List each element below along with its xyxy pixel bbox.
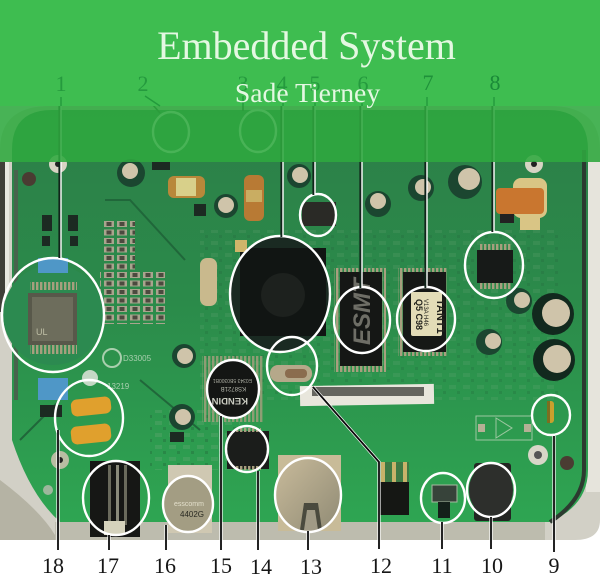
item 15 KENDIN chip xyxy=(202,356,264,422)
small dark parts xyxy=(40,162,206,442)
enclosure frame xyxy=(0,106,600,540)
number 17: 17 xyxy=(97,553,119,578)
leader lines: bottom xyxy=(58,387,554,552)
item 9 fuse and diode mark xyxy=(476,401,554,440)
ring 16 xyxy=(163,476,213,532)
number 3: 3 xyxy=(238,71,248,96)
number 12: 12 xyxy=(370,553,392,578)
ring 2 xyxy=(153,112,189,152)
ring 5 xyxy=(300,194,336,236)
item 11 switch xyxy=(432,485,457,518)
ring 6 xyxy=(334,287,390,353)
item 18 orange capacitors xyxy=(70,396,112,445)
item 7 TANT1 chip xyxy=(398,268,448,356)
numbers along bottom xyxy=(42,553,560,579)
subtitle: Sade Tierney xyxy=(235,77,380,108)
item 6 ESMT chip: ESMT xyxy=(349,276,376,345)
green board xyxy=(12,110,588,522)
ring 14 xyxy=(226,426,268,472)
surface traces and pads xyxy=(200,230,560,400)
number 4: 4 xyxy=(276,71,288,96)
callout rings xyxy=(2,110,570,535)
ring 3 xyxy=(240,110,276,152)
number 6: 6 xyxy=(358,71,368,96)
numbers over banner xyxy=(56,70,500,96)
barcode label xyxy=(300,384,434,406)
item 12 header pins xyxy=(380,462,409,515)
number 15: 15 xyxy=(210,553,232,578)
number 1: 1 xyxy=(56,71,66,96)
photo: circuit board: 13219 xyxy=(107,382,130,391)
number 11: 11 xyxy=(431,553,453,578)
ring 15 xyxy=(207,360,259,418)
mounting holes xyxy=(49,155,67,173)
green band overlay xyxy=(0,106,600,162)
ring 13 xyxy=(275,458,341,532)
ring 18 xyxy=(55,380,123,456)
ring 7 xyxy=(397,287,455,351)
ring 12 xyxy=(267,337,317,395)
item 17 phone jack xyxy=(90,461,140,537)
capacitors xyxy=(117,159,575,430)
ring 8 xyxy=(465,232,523,298)
3-pin header, item 5 xyxy=(302,202,336,226)
photo: circuit board xyxy=(0,106,600,540)
item 15 KENDIN chip: KENDIN xyxy=(211,395,248,406)
item 14 chip xyxy=(227,428,269,470)
ring 1 xyxy=(2,258,104,372)
title banner xyxy=(0,0,600,106)
number 18: 18 xyxy=(42,553,64,578)
ring 11 xyxy=(421,473,465,523)
ring 10 xyxy=(467,463,515,517)
item 7 TANT1 chip: Q5 C98 xyxy=(414,299,424,330)
item 6 ESMT chip xyxy=(334,268,386,372)
item 15 KENDIN chip: KS8721B xyxy=(221,385,246,391)
number 7: 7 xyxy=(422,70,434,95)
number 8: 8 xyxy=(490,70,500,95)
coils xyxy=(168,175,547,230)
item 10 power jack xyxy=(469,463,513,521)
number 9: 9 xyxy=(548,553,560,578)
item 16 transformer can: esscomm xyxy=(174,501,204,508)
item 7 TANT1 chip: V13A H46 xyxy=(422,299,428,327)
number 16: 16 xyxy=(154,553,176,578)
ring 17 xyxy=(83,461,149,535)
item 15 KENDIN chip: E0343 5B0300B1 xyxy=(213,377,252,383)
item 7 TANT1 chip: TANT1 xyxy=(434,299,446,334)
resistor arrays xyxy=(103,220,135,270)
number 14: 14 xyxy=(250,554,272,579)
crystal xyxy=(200,258,217,306)
item 16 transformer can: 4402G xyxy=(180,510,204,519)
item 12 crystal xyxy=(270,365,312,382)
ring 9 xyxy=(532,395,570,435)
leader lines over banner xyxy=(61,96,494,106)
ring 4 xyxy=(230,236,330,352)
item 13 RJ45 socket xyxy=(275,455,341,532)
number 10: 10 xyxy=(481,553,503,578)
number 5: 5 xyxy=(310,71,320,96)
leader lines: top xyxy=(60,96,494,288)
number 2: 2 xyxy=(138,71,148,96)
title: Embedded System xyxy=(157,23,456,68)
item 16 transformer can xyxy=(164,465,212,533)
item 1 transformer: UL xyxy=(36,327,48,337)
item 4 main processor xyxy=(230,236,330,352)
item 8 eight-pin chip xyxy=(477,244,513,289)
surface silk text: D33005 xyxy=(123,354,152,363)
item 1 transformer xyxy=(3,258,103,400)
number 13: 13 xyxy=(300,554,322,579)
